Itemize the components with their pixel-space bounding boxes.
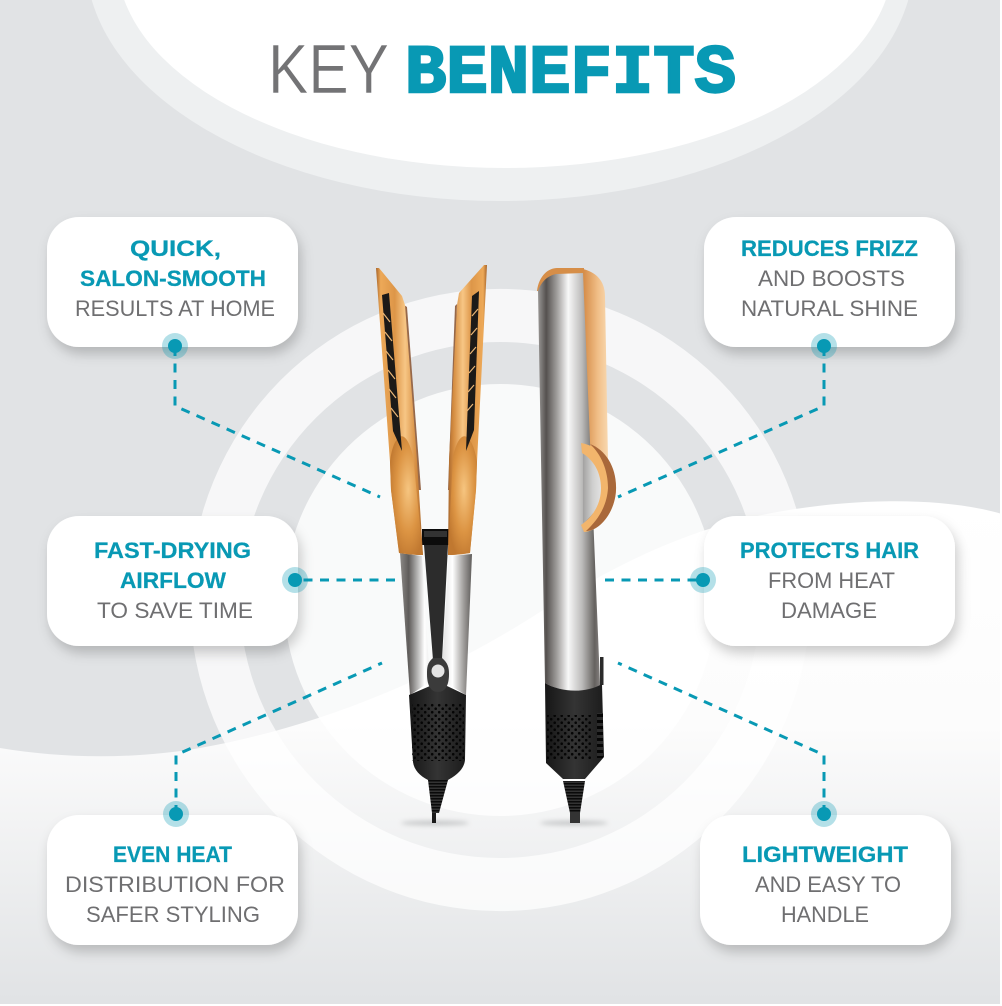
- connector: lightweight: [618, 663, 837, 827]
- card: lightweight: HANDLE: [781, 902, 869, 927]
- title: [268, 30, 736, 113]
- card: even heat: [47, 815, 298, 945]
- icon: closed hair straightener: [537, 268, 616, 826]
- card: reduces frizz: REDUCES FRIZZ: [741, 236, 918, 261]
- card: lightweight: AND EASY TO: [755, 872, 901, 897]
- connector: fast-drying: [282, 567, 395, 593]
- card: protects hair: PROTECTS HAIR: [740, 538, 919, 563]
- card: reduces frizz: [704, 217, 955, 347]
- card: quick salon-smooth results: QUICK,: [130, 236, 221, 261]
- card: quick salon-smooth results: [47, 217, 298, 347]
- connector: protects hair: [605, 567, 716, 593]
- connector: reduces frizz: [618, 333, 837, 497]
- card: protects hair: [704, 516, 955, 646]
- connector: quick results: [162, 333, 380, 497]
- card: even heat: SAFER STYLING: [86, 902, 260, 927]
- card: fast-drying airflow: FAST-DRYING: [94, 538, 251, 563]
- card: quick salon-smooth results: SALON-SMOOTH: [80, 266, 266, 291]
- card: lightweight: [700, 815, 951, 945]
- icon: open hair straightener: [376, 265, 487, 826]
- card: reduces frizz: AND BOOSTS: [758, 266, 905, 291]
- card: fast-drying airflow: TO SAVE TIME: [97, 598, 253, 623]
- title: BENEFITS: [405, 35, 736, 113]
- card: protects hair: FROM HEAT: [768, 568, 895, 593]
- title: KEY: [268, 30, 389, 108]
- card: lightweight: LIGHTWEIGHT: [742, 842, 909, 867]
- card: fast-drying airflow: [47, 516, 298, 646]
- card: fast-drying airflow: AIRFLOW: [120, 568, 226, 593]
- card: quick salon-smooth results: RESULTS AT HOME: [75, 296, 275, 321]
- card: reduces frizz: NATURAL SHINE: [741, 296, 918, 321]
- connector: even heat: [163, 663, 382, 827]
- card: even heat: EVEN HEAT: [113, 842, 233, 867]
- card: even heat: DISTRIBUTION FOR: [65, 872, 285, 897]
- card: protects hair: DAMAGE: [781, 598, 877, 623]
